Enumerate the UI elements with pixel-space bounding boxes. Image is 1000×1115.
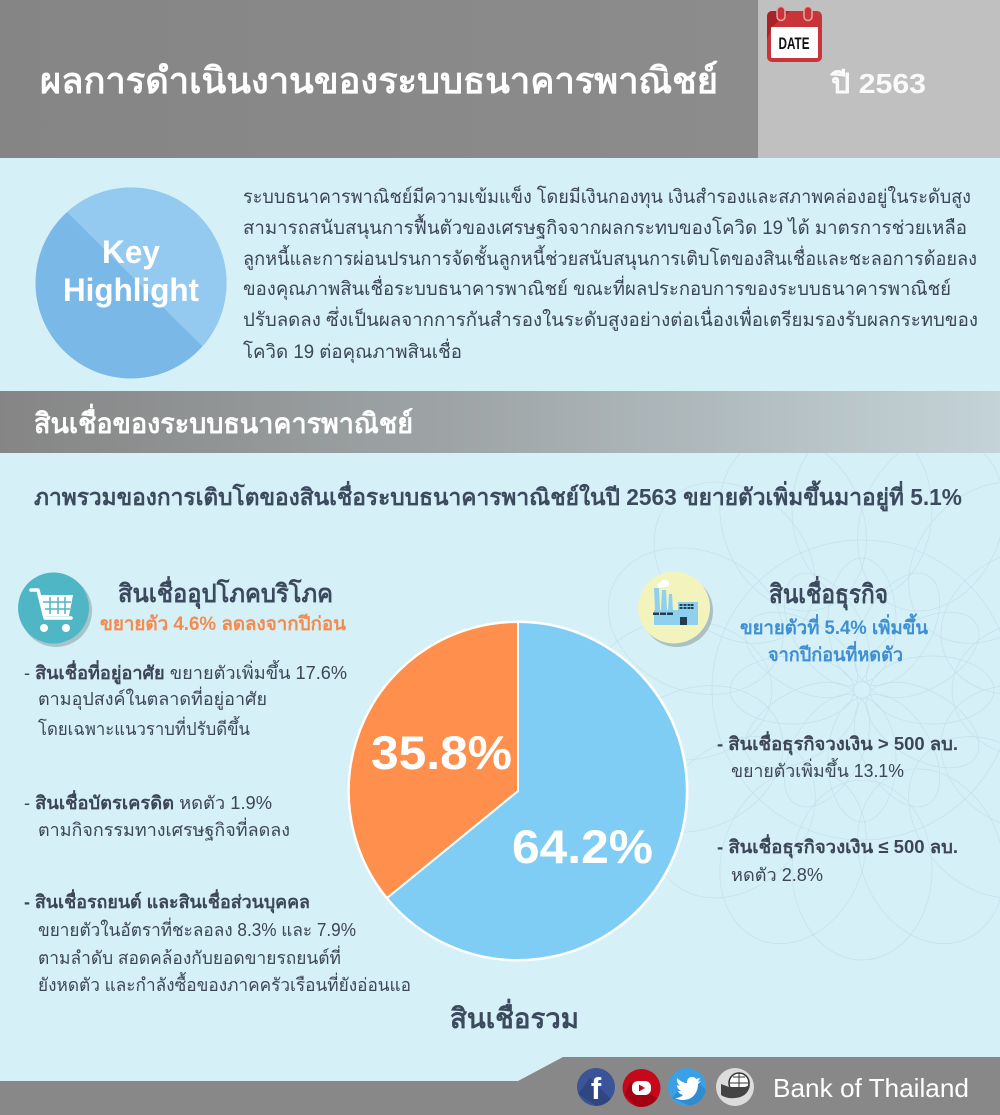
- summary sentence: ภาพรวมของการเติบโตของสินเชื่อระบบธนาคารพาณิชย์ในปี 2563 ขยายตัวเพิ่มขึ้นมาอยู่ที่ 5.1%: [34, 480, 962, 512]
- pie chart: total loans: [348, 620, 688, 962]
- consumer heading: สินเชื่ออุปโภคบริโภค: [118, 576, 333, 610]
- credit card text: [24, 790, 290, 841]
- icon: key highlight circle: Key: [102, 234, 160, 270]
- business loans below 500m: หดตัว 2.8%: [731, 865, 823, 885]
- slice: business 64.2%: [387, 622, 687, 960]
- panel: business loans: [638, 572, 958, 885]
- icon: key highlight circle: [36, 188, 226, 378]
- credit card text: - สินเชื่อบัตรเครดิต หดตัว 1.9%: [24, 790, 272, 813]
- header banner: [0, 0, 758, 158]
- key highlight text: โควิด 19 ต่อคุณภาพสินเชื่อ: [243, 338, 462, 364]
- key highlight text: สามารถสนับสนุนการฟื้นตัวของเศรษฐกิจจากผลกระทบของโควิด 19 ได้ มาตรการช่วยเหลือ: [243, 214, 967, 240]
- slice: consumer 35.8%: [349, 622, 518, 898]
- panel: key highlight: [36, 170, 978, 378]
- credit card text: ตามกิจกรรมทางเศรษฐกิจที่ลดลง: [38, 817, 290, 841]
- key highlight text: ของคุณภาพสินเชื่อระบบธนาคารพาณิชย์ ขณะที่ผลประกอบการของระบบธนาคารพาณิชย์: [243, 275, 951, 301]
- business loans above 500m: ขยายตัวเพิ่มขึ้น 13.1%: [731, 758, 904, 781]
- footer label: Bank of Thailand: [773, 1073, 969, 1103]
- title: ผลการดำเนินงานของระบบธนาคารพาณิชย์: [40, 60, 718, 101]
- business loans below 500m: [717, 834, 958, 885]
- auto and personal loans text: [24, 889, 411, 995]
- auto and personal loans text: ตามลำดับ สอดคล้องกับยอดขายรถยนต์ที่: [38, 945, 341, 968]
- icon: key highlight circle: Highlight: [63, 272, 199, 308]
- section heading band: [0, 391, 1000, 453]
- section heading band: สินเชื่อของระบบธนาคารพาณิชย์: [34, 403, 413, 439]
- icon: youtube: [622, 1069, 660, 1110]
- business loans above 500m: [717, 731, 958, 781]
- auto and personal loans text: ยังหดตัว และกำลังซื้อของภาคครัวเรือนที่ยังอ่อนแอ: [38, 972, 411, 995]
- auto and personal loans text: - สินเชื่อรถยนต์ และสินเชื่อส่วนบุคคล: [24, 889, 310, 914]
- icon: facebook: [577, 1068, 615, 1110]
- key highlight text: ปรับลดลง ซึ่งเป็นผลจากการกันสำรองในระดับสูงอย่างต่อเนื่องเพื่อเตรียมรองรับผลกระทบของ: [243, 306, 978, 331]
- mandala watermark: [586, 414, 1000, 966]
- icon: twitter: [668, 1068, 708, 1108]
- housing loans text: โดยเฉพาะแนวราบที่ปรับดีขึ้น: [38, 716, 250, 739]
- business loans below 500m: - สินเชื่อธุรกิจวงเงิน ≤ 500 ลบ.: [717, 834, 958, 859]
- business heading: สินเชื่อธุรกิจ: [769, 575, 888, 611]
- icon: factory: [638, 572, 713, 647]
- housing loans text: - สินเชื่อที่อยู่อาศัย ขยายตัวเพิ่มขึ้น 17.6%: [24, 660, 347, 685]
- panel: consumer loans: [18, 572, 411, 995]
- housing loans text: ตามอุปสงค์ในตลาดที่อยู่อาศัย: [38, 686, 267, 710]
- pie chart: total loans: 35.8%: [371, 726, 512, 779]
- year: ปี 2563: [829, 68, 926, 99]
- icon: shopping cart: [18, 572, 92, 647]
- key highlight text: ระบบธนาคารพาณิชย์มีความเข้มแข็ง โดยมีเงินกองทุน เงินสำรองและสภาพคล่องอยู่ในระดับสูง: [243, 184, 971, 209]
- key highlight text: [243, 184, 978, 364]
- footer bar: [0, 1057, 1000, 1115]
- date panel: [758, 0, 1000, 158]
- icon: calendar: DATE: [778, 34, 810, 53]
- business subheading: [740, 613, 928, 666]
- icon: globe ship: [716, 1068, 754, 1106]
- auto and personal loans text: ขยายตัวในอัตราที่ชะลอลง 8.3% และ 7.9%: [38, 917, 356, 940]
- business subheading: ขยายตัวที่ 5.4% เพิ่มขึ้น: [740, 613, 928, 639]
- business subheading: จากปีก่อนที่หดตัว: [768, 641, 903, 666]
- icon: calendar: [767, 6, 822, 62]
- key highlight text: ลูกหนี้และการผ่อนปรนการจัดชั้นลูกหนี้ช่วยสนับสนุนการเติบโตของสินเชื่อและชะลอการด้อยลง: [243, 245, 977, 271]
- pie chart: total loans: 64.2%: [512, 820, 653, 873]
- business loans above 500m: - สินเชื่อธุรกิจวงเงิน > 500 ลบ.: [717, 731, 958, 756]
- housing loans text: [24, 660, 347, 739]
- pie chart caption: สินเชื่อรวม: [450, 998, 579, 1034]
- icon: facebook: f: [591, 1071, 602, 1106]
- consumer subheading: ขยายตัว 4.6% ลดลงจากปีก่อน: [100, 613, 346, 635]
